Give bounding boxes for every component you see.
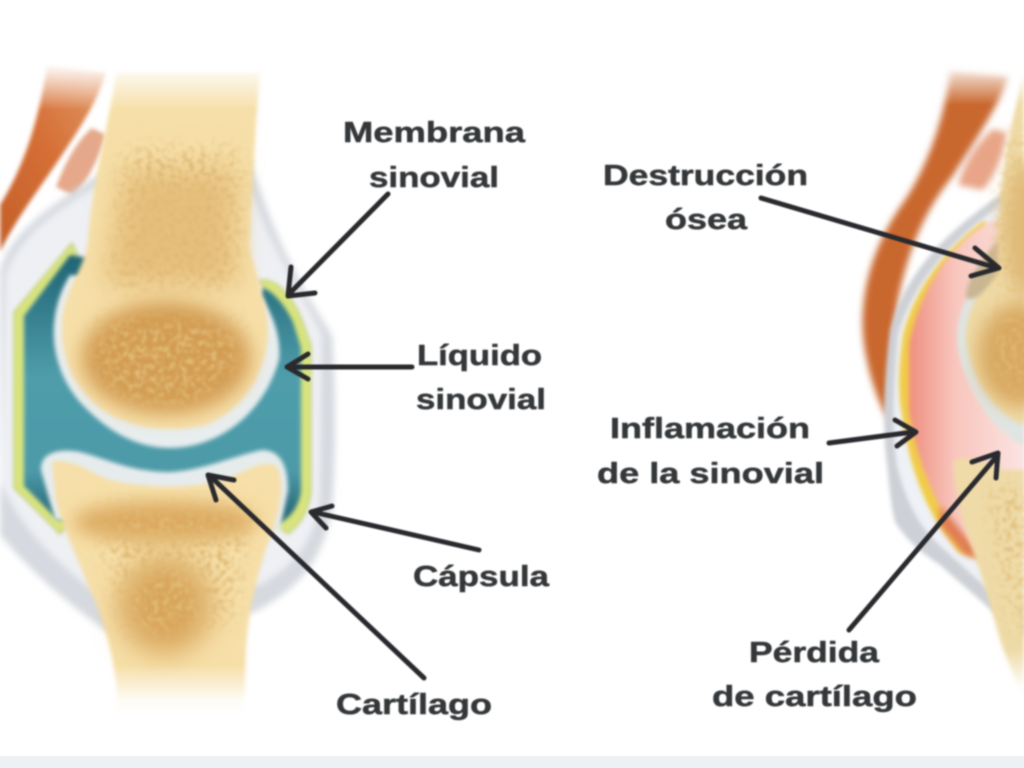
inflamed synovial, lower red band [940,505,985,560]
spongy bone, shaft [105,170,235,285]
muscle and tendon, right joint [863,70,1008,418]
label: destrucción ósea: ósea [665,204,748,236]
label: destrucción ósea [603,160,808,236]
arrow: cartílago [208,475,424,678]
inflamed synovial, yellow layer [899,220,1000,560]
synovial membrane, yellow lining [14,243,311,534]
label: cartílago: Cartílago [336,689,492,721]
synovial fluid cavity [24,255,301,525]
labels [336,117,917,721]
fade: right joint top [920,50,1024,105]
bone erosion [966,240,998,299]
upper bone, right joint [966,72,1024,425]
arrows [208,194,999,678]
panel: healthy joint [0,50,335,720]
bone speckle, lower [95,510,250,640]
arrow: cápsula [311,506,479,550]
bone speckle, right upper [985,130,1024,405]
fade: shaft top [30,50,320,110]
spongy bone, epiphysis [73,502,257,542]
spongy bone, right shaft [1004,160,1024,300]
label: líquido sinovial: Líquido [417,340,542,372]
label: membrana sinovial: Membrana [343,117,526,149]
label: pérdida de cartílago: Pérdida [749,637,880,669]
joint capsule, left joint [0,160,335,632]
panel: inflamed joint [863,50,1024,705]
upper bone [62,72,268,429]
cartilage remnant [957,275,1024,446]
joint capsule, right joint [884,190,1024,640]
bone speckle, right lower [990,490,1024,660]
arrow: membrana sinovial [288,194,388,296]
upper bone cartilage [54,275,279,448]
arrow: inflamación [829,420,916,446]
arrow: líquido sinovial [287,354,412,379]
label: líquido sinovial [416,340,546,416]
label: cápsula: Cápsula [413,561,550,593]
label: destrucción ósea: Destrucción [603,160,808,192]
label: inflamación de la sinovial: Inflamación [610,413,810,445]
label: membrana sinovial: sinovial [369,162,499,194]
arrow: pérdida de cartílago [849,453,998,630]
bottom strip [0,756,1024,768]
bone speckle, upper [95,150,240,405]
fade: right bone bottom [990,650,1024,705]
label: inflamación de la sinovial [597,413,824,490]
fade: shaft bottom [90,665,270,720]
spongy bone, diaphysis [119,557,211,653]
arrow: destrucción ósea [761,198,999,276]
label: inflamación de la sinovial: de la sinovial [597,458,824,490]
lower bone, right joint [953,458,1024,700]
spongy bone, right head [978,303,1024,407]
muscle and tendon, left joint [0,66,106,252]
label: pérdida de cartílago [712,637,917,713]
lower bone cartilage [41,450,288,530]
spongy bone, head [82,302,250,414]
label: membrana sinovial [343,117,526,194]
label: pérdida de cartílago: de cartílago [712,681,917,713]
lower bone [52,461,281,715]
label: líquido sinovial: sinovial [416,384,546,416]
inflamed synovial, pink layer [909,220,1024,560]
